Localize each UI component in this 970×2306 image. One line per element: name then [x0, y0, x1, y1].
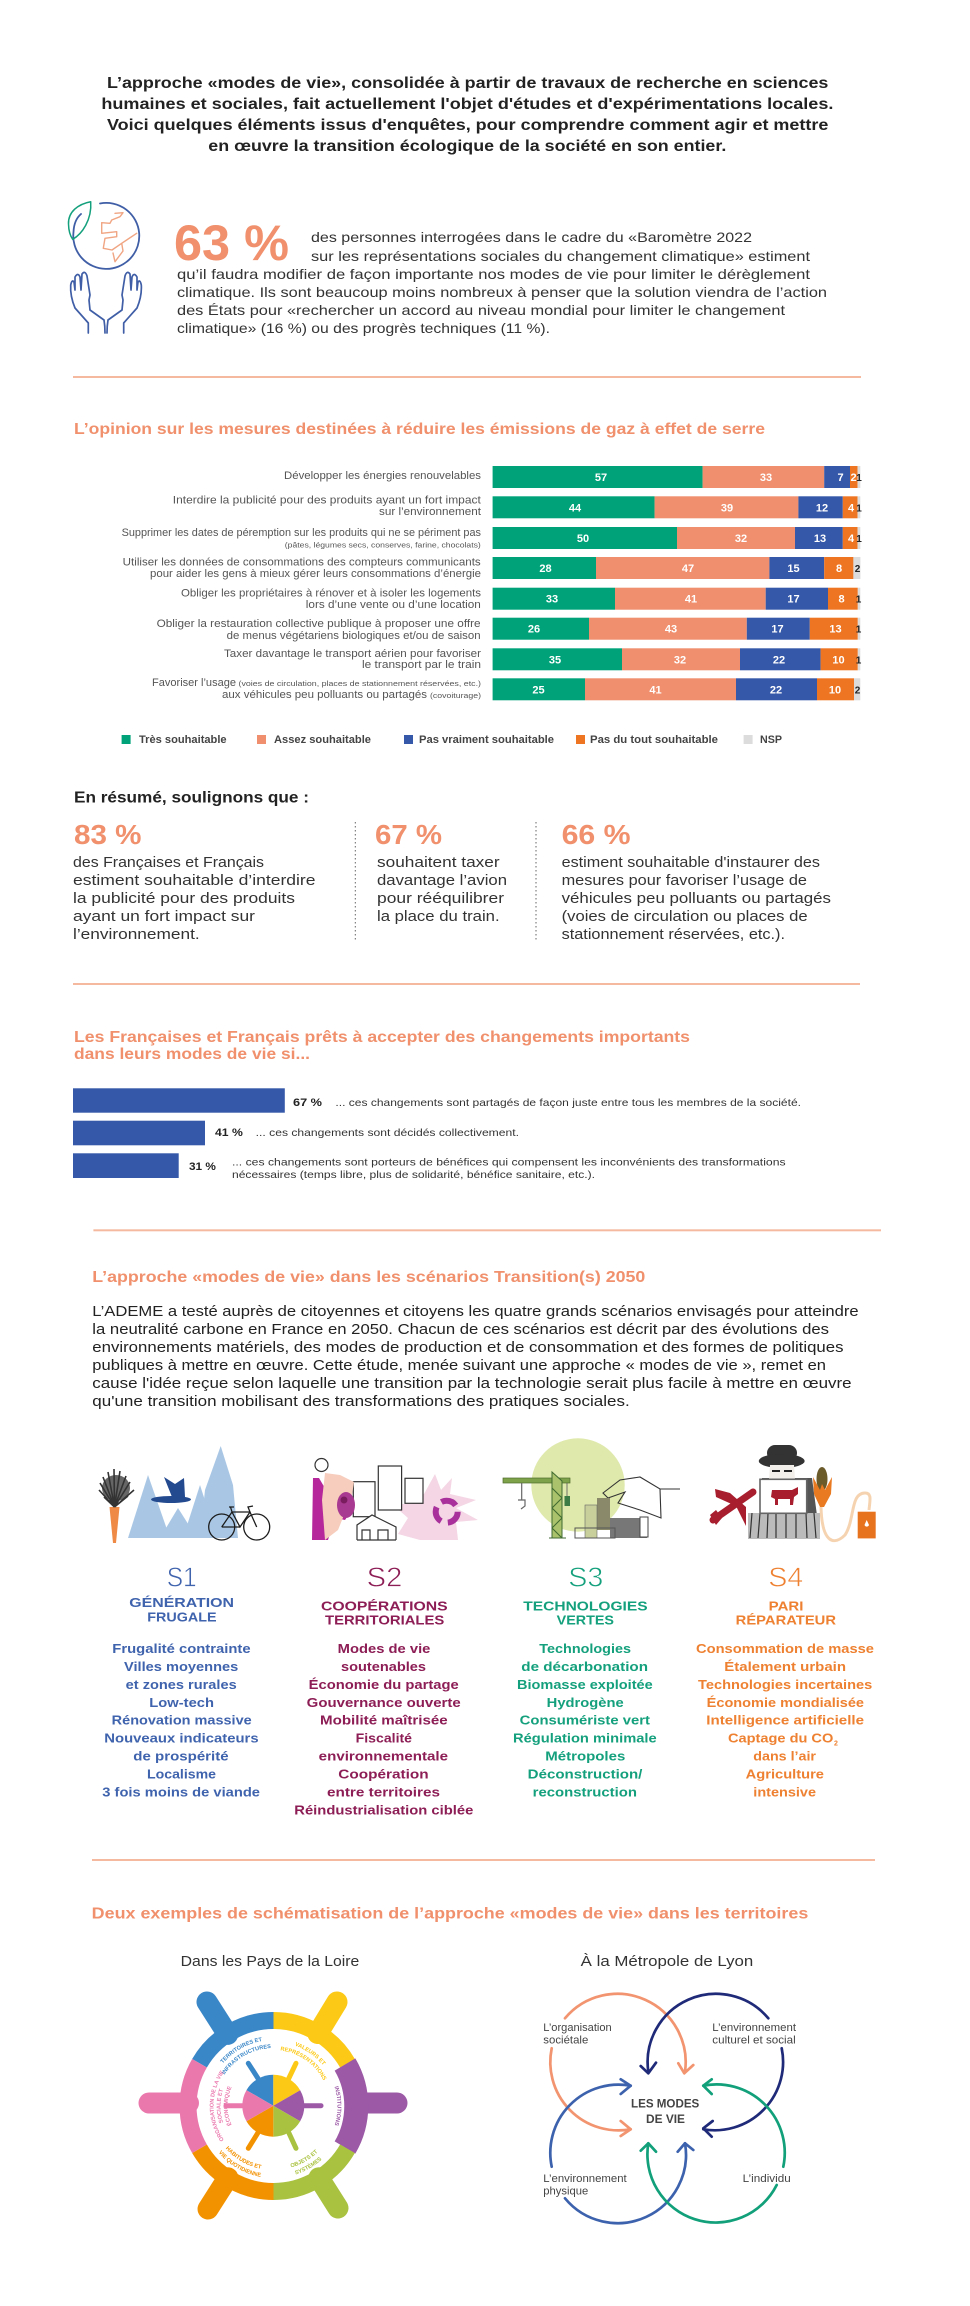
stat column: 66 %: (voies de circulation ou places de — [562, 909, 808, 925]
stat column: 83 %: l’environnement. — [73, 927, 200, 943]
bar row 7 — [493, 648, 862, 670]
S4 list: Consommation de masse — [696, 1642, 874, 1656]
stat column: 67 %: 67 % — [375, 819, 442, 850]
bar row 3 — [493, 527, 862, 549]
chart legend: Pas du tout souhaitable — [590, 734, 718, 746]
diagram labels: Lyon: physique — [543, 2186, 588, 2198]
chart legend: Pas vraiment souhaitable — [419, 734, 554, 746]
chart row labels: (covoiturage) — [430, 691, 482, 700]
bar row 8: 2 — [855, 685, 861, 696]
S3 list: reconstruction — [533, 1786, 637, 1800]
bar row 4: 28 — [539, 563, 552, 575]
S4 list: Économie mondialisée — [707, 1695, 864, 1710]
S4 title: PARI — [769, 1598, 803, 1613]
S3 list: Biomasse exploitée — [517, 1678, 653, 1692]
text block: barometer paragraph: qu’il faudra modifier de façon importante nos modes de vie pour limiter le dérèglement — [177, 267, 810, 282]
S3 title: VERTES — [557, 1613, 614, 1628]
S4 label: S4 — [768, 1562, 803, 1593]
chart row labels: Obliger la restauration collective publique à proposer une offre — [157, 618, 481, 630]
bar row 1: 57 — [595, 472, 607, 484]
bar row 2: 39 — [721, 502, 733, 514]
stat column: 66 %: stationnement réservées, etc.). — [562, 927, 785, 943]
bar row 8: 41 — [649, 684, 662, 696]
S1 list: et zones rurales — [126, 1678, 237, 1692]
bar: 41 % — [73, 1121, 519, 1145]
bar row 7: 10 — [832, 654, 845, 666]
S4 list: Captage du CO — [728, 1732, 834, 1746]
stat column: 67 %: souhaitent taxer — [377, 855, 500, 871]
bar row 7: 1 — [856, 655, 862, 666]
S2 list: Modes de vie — [338, 1642, 430, 1656]
stat: 63 %: 63 % — [174, 215, 289, 271]
bar: 41 %: ... ces changements sont décidés collectivement. — [256, 1127, 519, 1139]
intro text: Voici quelques éléments issus d'enquêtes, pour comprendre comment agir et mettre — [107, 117, 829, 134]
bar: 31 %: 31 % — [189, 1161, 216, 1173]
panel: scenario S1 — [99, 1446, 270, 1800]
bar: 31 %: ... ces changements sont porteurs de bénéfices qui compensent les inconvénients des transformations — [232, 1156, 786, 1168]
S3 title: TECHNOLOGIES — [523, 1598, 648, 1613]
diagram labels: Lyon: culturel et social — [712, 2034, 796, 2046]
panel: scenario S3 — [503, 1438, 680, 1800]
text block: barometer paragraph: climatique. Ils sont beaucoup moins nombreux à penser que la solution viendra de l’action — [177, 285, 827, 300]
chart row labels: Utiliser les données de consommations des compteurs communicants — [123, 556, 481, 568]
S4 list: Agriculture — [746, 1768, 824, 1782]
icon: globe held by hands — [68, 202, 141, 333]
text block: barometer paragraph: climatique» (16 %) ou des progrès techniques (11 %). — [177, 321, 550, 336]
text block: ADEME — [92, 1304, 859, 1410]
bar row 1: 7 — [837, 472, 844, 484]
wheel sector labels — [210, 2037, 342, 2177]
text block: barometer paragraph: sur les représentations sociales du changement climatique» estiment — [311, 249, 810, 264]
S1 title: FRUGALE — [147, 1610, 217, 1625]
bar row 4: 15 — [787, 563, 800, 575]
chart row labels: Supprimer les dates de péremption sur les produits qui ne se périment pas — [122, 527, 481, 539]
bar row 8: 22 — [770, 684, 782, 696]
S4 list — [696, 1642, 874, 1800]
bar row 6: 1 — [856, 625, 862, 636]
diagram labels: Lyon: L’organisation — [543, 2022, 612, 2034]
bar row 6: 13 — [829, 624, 842, 636]
S1 list: Frugalité contrainte — [112, 1642, 251, 1656]
text block: barometer paragraph — [177, 230, 827, 336]
stat column: 66 %: mesures pour favoriser l’usage de — [562, 873, 807, 889]
S1 list: de prospérité — [133, 1750, 229, 1764]
S4 title — [736, 1598, 837, 1628]
S3 list: de décarbonation — [521, 1660, 648, 1674]
text block: ADEME: la neutralité carbone en France en 2050. Chacun de ces scénarios est décrit par des évolutions des — [92, 1322, 829, 1338]
wheel sector labels: TERRITOIRES ET — [220, 2037, 262, 2063]
diagram: Pays de la Loire wheel — [138, 1992, 408, 2220]
stat column: 83 %: ayant un fort impact sur — [73, 909, 255, 925]
diagram labels: Lyon: sociétale — [543, 2034, 588, 2046]
text block: barometer paragraph: des personnes interrogées dans le cadre du «Baromètre 2022 — [311, 230, 752, 245]
bar: 31 %: nécessaires (temps libre, plus de solidarité, bénéfice sanitaire, etc.). — [232, 1169, 595, 1181]
bar row 2: 12 — [816, 502, 828, 514]
stat column: 83 % — [73, 819, 316, 943]
stat column: 83 %: la publicité pour des produits — [73, 891, 295, 907]
bar row 4: 8 — [836, 563, 842, 575]
S2 label: S2 — [367, 1562, 402, 1593]
bar row 5: 41 — [685, 594, 697, 606]
S4 list: Technologies incertaines — [698, 1678, 872, 1692]
stat column: 66 %: 66 % — [562, 819, 631, 850]
S2 list: Fiscalité — [356, 1732, 412, 1746]
chart row labels: (voies de circulation, places de stationnement réservées, etc.) — [238, 679, 482, 688]
S2 list: Coopération — [338, 1768, 429, 1782]
bar row 5: 8 — [838, 594, 845, 606]
S1 title — [129, 1595, 234, 1625]
chart row labels: sur l’environnement — [379, 506, 481, 518]
bar row 1 — [493, 466, 862, 488]
diagram labels: Lyon: L’individu — [743, 2173, 791, 2185]
intro text: en œuvre la transition écologique de la société en son entier. — [208, 138, 726, 155]
S2 list: Gouvernance ouverte — [307, 1696, 461, 1710]
chart row labels: le transport par le train — [362, 659, 481, 671]
bar row 3: 50 — [577, 533, 589, 545]
wheel sector labels: REPRÉSENTATIONS — [280, 2046, 326, 2080]
S1 title: GÉNÉRATION — [129, 1595, 234, 1610]
stat column: 67 %: pour rééquilibrer — [377, 891, 504, 907]
subheading: Métropole de Lyon: À la Métropole de Lyon — [581, 1953, 753, 1970]
S1 list: Villes moyennes — [124, 1660, 238, 1674]
bar row 2: 44 — [569, 502, 582, 514]
illustration: carrot, trees, bird, bicycle — [99, 1446, 270, 1543]
arrows: salmon — [550, 1994, 693, 2136]
bar row 5: 1 — [856, 595, 862, 606]
stat column: 66 % — [562, 819, 831, 943]
chart legend — [122, 734, 782, 746]
inner wheel — [226, 2063, 321, 2148]
intro text — [101, 75, 833, 155]
wheel sector labels: OBJETS ET — [290, 2149, 317, 2167]
bar row 3: 32 — [735, 533, 747, 545]
bar row 3: 13 — [814, 533, 826, 545]
illustration: plane, farmer with cow, corn, oil barrel — [710, 1445, 876, 1541]
wheel handles — [149, 2002, 397, 2209]
illustration: crane, hand, city — [503, 1438, 680, 1538]
text block: barometer paragraph: des États pour «rechercher un accord au niveau mondial pour limiter le changement — [177, 302, 785, 318]
S3 list: Métropoles — [545, 1750, 625, 1764]
bar: 67 %: ... ces changements sont partagés de façon juste entre tous les membres de la société. — [335, 1097, 801, 1109]
chart legend: Assez souhaitable — [274, 734, 371, 746]
diagram labels: Lyon: DE VIE — [646, 2114, 685, 2126]
heading: ready to accept changes — [74, 1029, 690, 1063]
heading: ready to accept changes: dans leurs modes de vie si... — [74, 1046, 310, 1063]
S4 list: intensive — [753, 1786, 816, 1800]
text block: ADEME: L’ADEME a testé auprès de citoyennes et citoyens les quatre grands scénarios envisagés pour atteindre — [92, 1304, 859, 1320]
wheel sector labels: HABITUDES ET — [226, 2146, 262, 2168]
diagram labels: Lyon: L’environnement — [543, 2173, 627, 2185]
S1 list — [102, 1642, 260, 1800]
S2 title — [321, 1598, 448, 1628]
bar row 2: 4 — [848, 502, 855, 514]
S2 list: Réindustrialisation ciblée — [294, 1804, 473, 1818]
bar row 6: 43 — [665, 624, 677, 636]
intro text: humaines et sociales, fait actuellement l'objet d'études et d'expérimentations locales. — [101, 96, 833, 113]
wheel sector labels: ORGANISATION DE LA VIE — [210, 2070, 224, 2142]
wheel sector labels: INFRASTRUCTURES — [222, 2044, 271, 2074]
panel: scenario S2 — [294, 1458, 478, 1818]
S1 list: Low-tech — [149, 1696, 214, 1710]
S3 list: Régulation minimale — [513, 1732, 657, 1746]
panel: scenario S4 — [696, 1445, 876, 1800]
stat column: 66 %: estiment souhaitable d'instaurer des — [562, 855, 820, 871]
S1 label: S1 — [167, 1562, 197, 1593]
bar row 2 — [493, 496, 862, 518]
bar: 67 %: 67 % — [293, 1097, 322, 1109]
wheel ring — [188, 2020, 356, 2192]
chart legend: Très souhaitable — [139, 734, 227, 746]
S2 list: Économie du partage — [309, 1677, 459, 1692]
S1 list: 3 fois moins de viande — [102, 1786, 260, 1800]
S3 title — [523, 1598, 648, 1628]
wheel sector labels: INSTITUTIONS — [334, 2086, 342, 2126]
chart row labels: de menus végétariens biologiques et/ou de saison — [227, 630, 481, 642]
bar row 3: 1 — [856, 534, 862, 545]
S4 list: Intelligence artificielle — [706, 1714, 864, 1728]
text block: ADEME: publiques à mettre en œuvre. Cette étude, menée suivant une approche « modes de vie », remet en — [92, 1358, 826, 1374]
chart row labels: (pâtes, légumes secs, conserves, farine, chocolats) — [285, 540, 481, 550]
bar row 8 — [493, 678, 861, 700]
bar row 1: 33 — [760, 472, 772, 484]
bar row 8: 10 — [829, 684, 841, 696]
wheel sector labels: VIE QUOTIDIENNE — [220, 2150, 262, 2177]
stacked bar chart — [122, 466, 862, 701]
arrows: navy — [641, 1994, 783, 2137]
S2 title: TERRITORIALES — [325, 1613, 445, 1628]
bar: 67 % — [73, 1088, 801, 1113]
stat column: 83 %: estiment souhaitable d’interdire — [73, 873, 316, 889]
chart row labels: Interdire la publicité pour des produits ayant un fort impact — [173, 494, 481, 506]
subheading: Pays de la Loire: Dans les Pays de la Loire — [181, 1953, 359, 1970]
diagram: Métropole de Lyon loops — [550, 1994, 785, 2223]
heading: summary: En résumé, soulignons que : — [74, 790, 309, 806]
chart row labels: Obliger les propriétaires à rénover et à isoler les logements — [181, 588, 482, 600]
S2 title: COOPÉRATIONS — [321, 1598, 448, 1613]
stat column: 83 %: 83 % — [74, 819, 142, 850]
S3 list — [513, 1642, 657, 1800]
bar: 31 % — [73, 1153, 786, 1181]
stat column: 67 %: la place du train. — [377, 909, 500, 925]
bar: 41 %: 41 % — [215, 1127, 243, 1139]
bar row 4 — [493, 557, 861, 579]
wheel sector labels: SYSTÈMES — [295, 2157, 322, 2174]
S4 title: RÉPARATEUR — [736, 1613, 837, 1628]
bar row 8: 25 — [532, 684, 545, 696]
wheel sector labels: ÉCONOMIQUE — [224, 2086, 232, 2126]
bar row 7: 22 — [773, 654, 785, 666]
S3 list: Technologies — [539, 1642, 631, 1656]
arrows: green — [641, 2079, 785, 2223]
bar row 1: 1 — [856, 473, 862, 484]
chart row labels: lors d’une vente ou d’une location — [306, 599, 481, 611]
bar row 6: 17 — [771, 624, 784, 636]
chart row labels: Taxer davantage le transport aérien pour favoriser — [224, 648, 481, 660]
bar row 3: 4 — [848, 533, 855, 545]
bar row 6 — [493, 618, 862, 640]
heading: two examples: Deux exemples de schématisation de l’approche «modes de vie» dans les territoires — [92, 1906, 808, 1922]
S3 label: S3 — [568, 1562, 603, 1593]
S1 list: Nouveaux indicateurs — [104, 1732, 259, 1746]
stat column: 66 %: véhicules peu polluants ou partagés — [562, 891, 831, 907]
bar row 5 — [493, 588, 862, 610]
chart row labels — [122, 470, 482, 701]
bar row 7: 32 — [674, 654, 686, 666]
S4 list: 2 — [834, 1740, 838, 1748]
S2 list: soutenables — [341, 1660, 426, 1674]
bar row 7: 35 — [549, 654, 561, 666]
illustration: farmer, buildings, recycling — [312, 1458, 478, 1540]
chart row labels: Favoriser l’usage — [152, 677, 236, 689]
stat column: 83 %: des Françaises et Français — [73, 855, 264, 871]
S4 list: Étalement urbain — [724, 1659, 846, 1674]
S1 list: Rénovation massive — [112, 1714, 252, 1728]
chart legend: NSP — [760, 734, 782, 746]
arrows: blue — [550, 2079, 693, 2223]
text block: ADEME: environnements matériels, des modes de production et de consommation et des formes de politiques — [92, 1340, 844, 1356]
intro text: L’approche «modes de vie», consolidée à partir de travaux de recherche en sciences — [107, 75, 828, 92]
stat column: 67 %: davantage l’avion — [377, 873, 507, 889]
S2 list: environnementale — [319, 1750, 448, 1764]
heading: scenarios: L’approche «modes de vie» dans les scénarios Transition(s) 2050 — [92, 1269, 645, 1286]
diagram labels: Lyon — [543, 2022, 796, 2198]
S3 list: Déconstruction/ — [528, 1768, 643, 1782]
bar row 1: 2 — [850, 472, 857, 484]
heading: ready to accept changes: Les Françaises et Français prêts à accepter des changements importants — [74, 1029, 690, 1046]
S3 list: Consumériste vert — [520, 1714, 651, 1728]
horizontal bars: acceptance conditions — [73, 1088, 801, 1181]
stat column: 67 % — [375, 819, 507, 925]
bar row 4: 2 — [855, 564, 861, 575]
text block: ADEME: qu'une transition mobilisant des transformations des pratiques sociales. — [92, 1394, 630, 1410]
diagram labels: Lyon: L’environnement — [712, 2022, 796, 2034]
bar row 4: 47 — [682, 563, 694, 575]
chart row labels: aux véhicules peu polluants ou partagés — [222, 689, 428, 701]
S3 list: Hydrogène — [547, 1696, 624, 1710]
chart row labels: Développer les énergies renouvelables — [284, 470, 482, 482]
bar row 5: 17 — [787, 594, 800, 606]
wheel sector labels: SOCIALE ET — [216, 2088, 223, 2124]
S2 list: entre territoires — [327, 1786, 440, 1800]
S2 list — [294, 1642, 473, 1818]
diagram labels: Lyon: LES MODES — [631, 2098, 700, 2110]
bar row 5: 33 — [546, 594, 558, 606]
wheel sector labels: VALEURS ET — [296, 2042, 326, 2064]
S2 list: Mobilité maîtrisée — [320, 1714, 448, 1728]
S4 list: dans l’air — [753, 1750, 816, 1764]
chart row labels: pour aider les gens à mieux gérer leurs consommations d’énergie — [150, 568, 481, 580]
S1 list: Localisme — [147, 1768, 216, 1782]
heading: opinion: L’opinion sur les mesures destinées à réduire les émissions de gaz à effet de serre — [74, 421, 765, 438]
bar row 6: 26 — [528, 624, 540, 636]
bar row 2: 1 — [856, 503, 862, 514]
text block: ADEME: cause l'idée reçue selon laquelle une transition par la technologie serait plus facile à mettre en œuvre — [92, 1376, 852, 1392]
